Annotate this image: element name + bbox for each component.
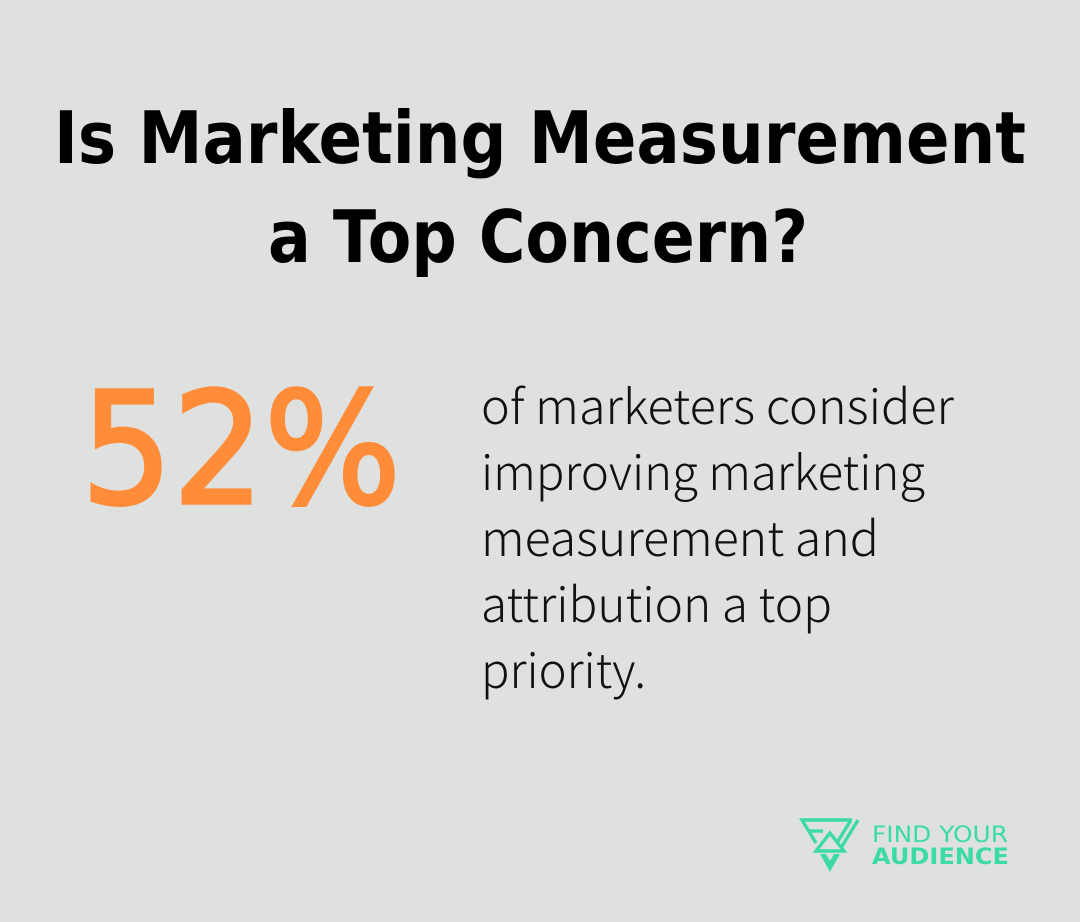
statistic description	[481, 368, 955, 702]
title: a Top Concern?	[268, 195, 808, 279]
logo text	[872, 823, 1009, 870]
statistic description: attribution a top	[481, 566, 832, 636]
logo: Find Your Audience	[802, 820, 1009, 872]
title	[54, 96, 1026, 279]
logo text: AUDIENCE	[872, 845, 1009, 870]
statistic description: priority.	[481, 632, 646, 702]
logo text: FIND YOUR	[872, 823, 1008, 848]
statistic description: measurement and	[481, 500, 879, 570]
big statistic: 52%: 52%	[81, 359, 401, 540]
statistic description: of marketers consider	[481, 368, 955, 438]
icon: triangle logo mark	[802, 820, 858, 872]
statistic description: improving marketing	[481, 434, 925, 504]
